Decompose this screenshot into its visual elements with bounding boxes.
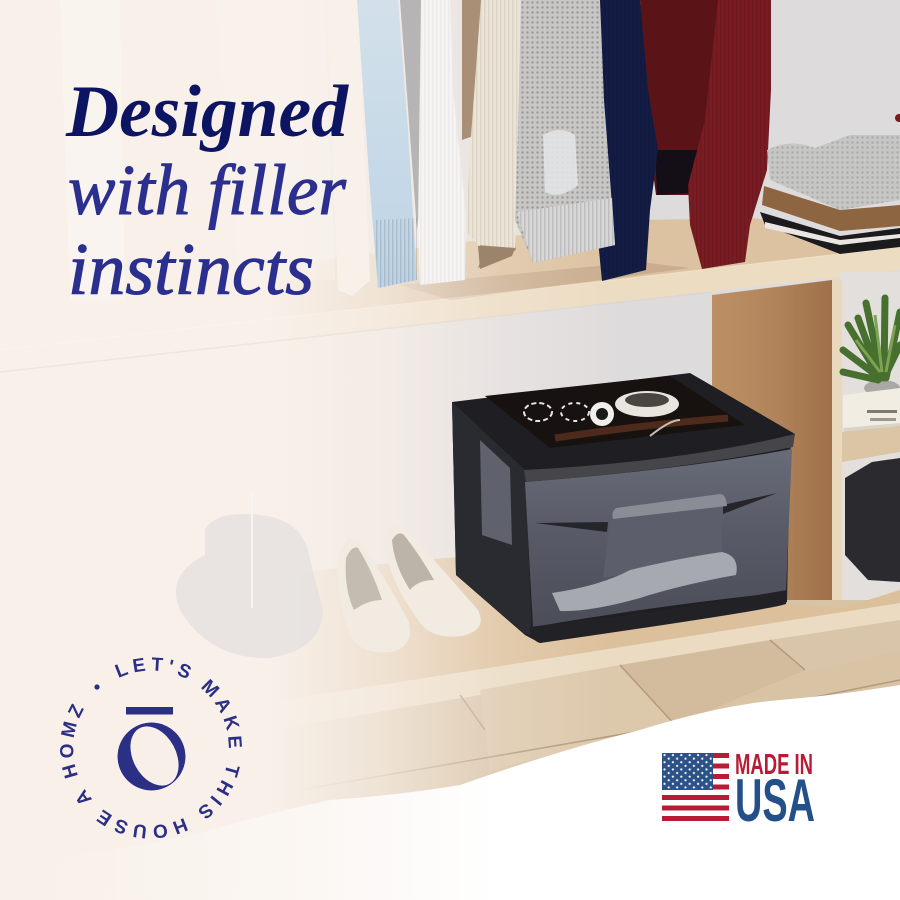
title line 2: with filler bbox=[68, 150, 347, 230]
lower shelf and floor bbox=[0, 540, 900, 900]
right shoe bbox=[384, 524, 481, 637]
folded clothes stack bbox=[760, 114, 900, 254]
title bbox=[65, 71, 349, 311]
drawer side window bbox=[480, 440, 512, 545]
upper shelf bbox=[0, 218, 900, 372]
logo bar bbox=[126, 707, 173, 714]
sweater: cream left bbox=[326, 0, 370, 296]
slit right bbox=[723, 493, 777, 514]
faint hanging curtain shapes bbox=[0, 0, 900, 372]
books bbox=[843, 388, 900, 438]
jewellery bbox=[524, 391, 728, 438]
sweater: maroon sleeve bbox=[688, 0, 771, 269]
hanging sweaters bbox=[326, 0, 771, 296]
title line 1: Designed bbox=[65, 71, 349, 153]
american flag bbox=[662, 753, 729, 821]
brand badge bbox=[60, 657, 242, 838]
base lip bbox=[530, 590, 787, 643]
middle small shelf bbox=[842, 426, 900, 462]
dark storage box bbox=[845, 458, 900, 582]
sweater: cream ribbed bbox=[466, 0, 519, 269]
tray recess bbox=[485, 376, 745, 448]
faint bag bbox=[176, 492, 323, 658]
sweater dark hem bbox=[655, 150, 700, 195]
made in usa badge bbox=[625, 740, 840, 836]
drawer side bbox=[452, 402, 532, 635]
storage drawer bbox=[452, 373, 795, 643]
wooden divider panel bbox=[712, 279, 842, 605]
badge background bbox=[625, 740, 840, 836]
sweater: tan bbox=[462, 0, 516, 268]
separator dot bbox=[94, 684, 100, 690]
drawer silhouette bbox=[452, 373, 795, 643]
slit left bbox=[535, 522, 608, 532]
sweater: light blue bbox=[357, 0, 417, 288]
sweater: white bbox=[418, 0, 466, 285]
made in text: MADE IN bbox=[735, 749, 813, 781]
sweater: maroon body bbox=[640, 0, 730, 195]
potted plant bbox=[843, 298, 900, 396]
circular slogan: LET'S MAKE THIS HOUSE A HOMZ bbox=[60, 657, 242, 838]
handle bbox=[612, 494, 727, 519]
folded cloth bbox=[552, 552, 737, 611]
title line 3: instincts bbox=[68, 229, 314, 311]
front panel bbox=[525, 449, 792, 627]
bottom white fade bbox=[0, 685, 900, 900]
sweater: navy bbox=[598, 0, 658, 281]
right compartment wall bbox=[840, 272, 900, 612]
handle recess bbox=[603, 508, 722, 578]
shoes bbox=[338, 524, 481, 652]
front rim bbox=[524, 434, 795, 482]
logo letter o bbox=[118, 722, 186, 790]
left shoe bbox=[338, 538, 410, 652]
usa text: USA bbox=[735, 767, 815, 834]
sweater: grey behind bbox=[400, 0, 425, 230]
sweater: grey knit bbox=[515, 0, 615, 263]
